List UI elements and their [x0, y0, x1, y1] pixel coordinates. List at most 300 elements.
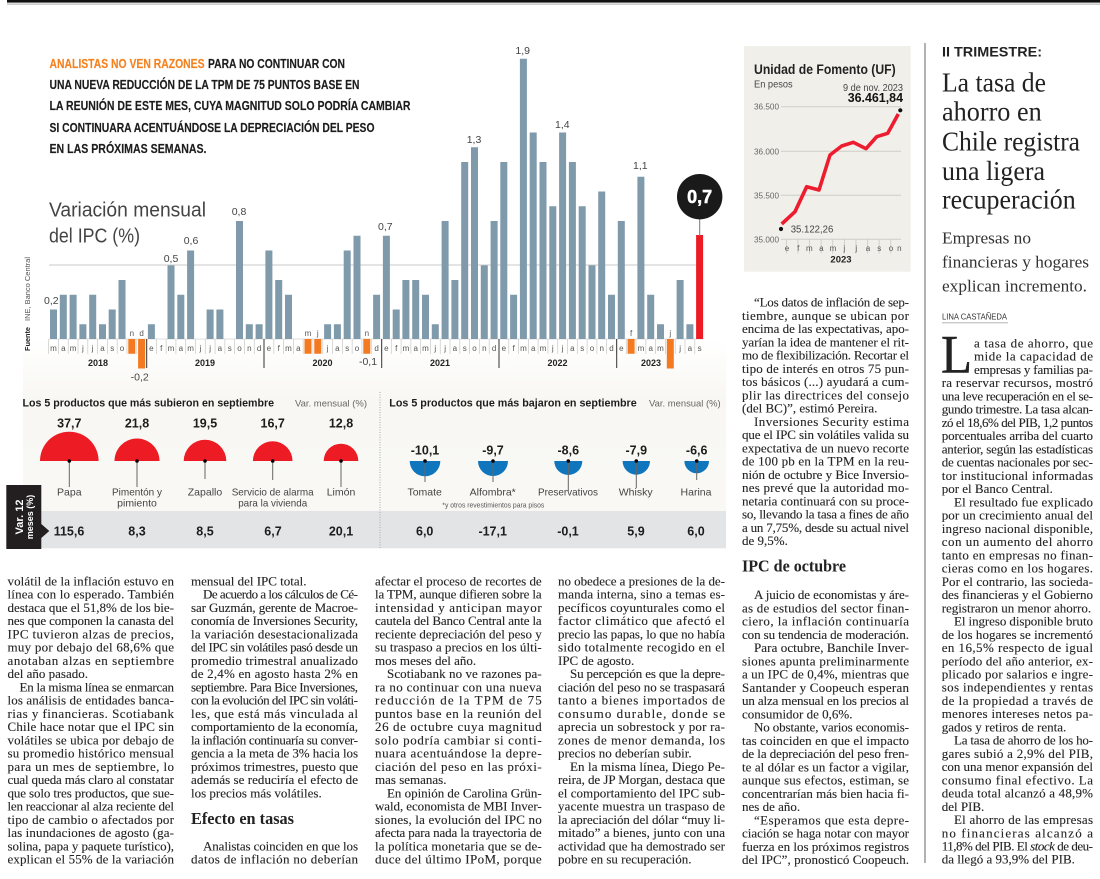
- month labels: d: [492, 344, 496, 353]
- body column 6: una leve recuperación en el se-: [942, 388, 1093, 404]
- rising 12-month values: 8,3: [128, 525, 146, 539]
- body column 3: nuara acentuándose la depre-: [375, 746, 542, 760]
- body column 3: reducción de la TPM de 75: [375, 692, 542, 708]
- month labels: j: [561, 344, 564, 353]
- body column 2: [191, 573, 358, 866]
- body column 6: zó el 18,6% del PIB, 1,2 puntos: [942, 415, 1093, 430]
- rising product labels: Servicio de alarma: [232, 487, 314, 499]
- body column 5: nes prevé que la autoridad mo-: [742, 480, 909, 495]
- rising product labels: Pimentón y: [112, 487, 163, 499]
- month labels: f: [160, 344, 163, 353]
- callout: latest value 0,7: [677, 174, 722, 236]
- body column 4: IPC de agosto.: [558, 653, 634, 668]
- blue half-circles: [410, 461, 709, 476]
- rising product labels: Papa: [57, 487, 82, 499]
- body column 3: puntos base en la reunión del: [375, 706, 542, 721]
- month labels: a: [100, 344, 105, 353]
- month labels: j: [443, 344, 446, 353]
- body column 3: la política monetaria que se de-: [375, 838, 542, 853]
- body column 1: las inundaciones de agosto (ga-: [8, 825, 174, 840]
- body column 1: cual queda más claro al constatar: [8, 772, 175, 787]
- body column 1: nes que componen la canasta del: [8, 613, 174, 628]
- body column 6: de la propiedad a través de: [942, 693, 1093, 708]
- body column 5: ciación se haga notar con mayor: [742, 826, 910, 840]
- body column 5: tipo de interés en otros 75 pun-: [742, 361, 909, 376]
- falling 12-month values: 6,0: [416, 525, 433, 539]
- heading: rising products: Los 5 productos que más subieron en septiembre: [22, 398, 274, 410]
- UF red line: [782, 114, 898, 224]
- body column 3: mos meses del año.: [375, 653, 476, 668]
- falling 12-month values: 5,9: [627, 525, 645, 539]
- body column 1: anotaban alzas en septiembre: [8, 653, 174, 668]
- kicker: II trimestre: II TRIMESTRE:: [942, 44, 1042, 60]
- body column 2: la inflación continuaría su conver-: [191, 732, 358, 747]
- rising product labels: Limón: [327, 487, 355, 499]
- body column 4: zones de menor demanda, los: [558, 732, 725, 747]
- UF month labels: o: [889, 244, 894, 253]
- body column 5: tos básicos (...) ayudará a cum-: [742, 374, 909, 389]
- body column 4: pobre en su recuperación.: [558, 852, 692, 866]
- UF month labels: m: [830, 244, 837, 253]
- body column 5: un alza mensual en los precios al: [742, 693, 909, 708]
- month labels: d: [374, 344, 379, 353]
- UF month labels: f: [797, 244, 800, 253]
- body column 5: “Los datos de inflación de sep-: [754, 294, 909, 310]
- body column 6: por el Banco Central.: [942, 481, 1053, 496]
- body column 6: gares subió a 2,9% del PIB,: [942, 746, 1093, 761]
- body column 1: tipo de cambio o afectados por: [8, 812, 175, 827]
- body column 6: cieras como en los hogares.: [942, 561, 1093, 576]
- body column 4: no obedece a presiones de la de-: [558, 573, 725, 588]
- subheading: IPC de octubre: IPC de octubre: [742, 557, 846, 576]
- body column 5: te al dólar es un factor a vigilar,: [742, 759, 909, 774]
- month labels: j: [678, 344, 681, 353]
- body column 3: su traspaso a precios en los últi-: [375, 640, 542, 654]
- month labels: a: [335, 344, 340, 353]
- month labels: m: [657, 344, 664, 353]
- body column 1: línea con lo esperado. También: [8, 586, 174, 602]
- rising 12-month values: [54, 525, 353, 539]
- UF month labels: e: [785, 244, 790, 253]
- rising 12-month values: 20,1: [329, 525, 353, 539]
- month labels: e: [149, 344, 154, 353]
- month labels: j: [668, 329, 671, 338]
- body column 5: Inversiones Security estima: [754, 414, 909, 429]
- body column 3: la TPM, aunque difieren sobre la: [375, 586, 542, 602]
- headline: analistas no ven razones: LA REUNIÓN DE ESTE MES, CUYA MAGNITUD SOLO PODRÍA CAMBIAR: [50, 98, 410, 113]
- body column 2: De acuerdo a los cálculos de Cé-: [203, 586, 358, 602]
- body column 5: Santander y Coopeuch esperan: [742, 680, 910, 695]
- body column 1: En la misma línea se enmarcan: [20, 679, 174, 694]
- body column 4: manda interna, sino a temas es-: [558, 586, 725, 602]
- body column 6: anterior, según las estadísticas: [942, 441, 1093, 456]
- month labels: o: [237, 344, 242, 353]
- month labels: m: [305, 329, 312, 338]
- body column 5: yarían la idea de mantener el rit-: [742, 334, 909, 349]
- body column 4: el comportamiento del IPC sub-: [558, 785, 725, 800]
- month labels: n: [599, 344, 604, 353]
- falling 12-month values: -17,1: [478, 525, 507, 539]
- falling values: -10,1: [411, 443, 439, 457]
- month labels: j: [91, 344, 94, 353]
- UF month labels: j: [854, 244, 857, 253]
- falling product labels: Harina: [681, 487, 712, 499]
- month labels: m: [168, 344, 175, 353]
- body column 6: [942, 336, 1093, 866]
- rising values: 21,8: [125, 417, 149, 431]
- month labels: f: [395, 344, 398, 353]
- body column 6: registraron un menor ahorro.: [942, 600, 1091, 615]
- article headline: recuperación: [942, 184, 1076, 214]
- month labels: [50, 329, 702, 353]
- year labels: 2023: [641, 358, 661, 368]
- body column 5: del IPC”, pronosticó Coopeuch.: [742, 852, 909, 867]
- rising 12-month values: 115,6: [54, 525, 84, 539]
- month labels: a: [531, 344, 536, 353]
- body column 1: destaca que el 51,8% de los bie-: [8, 600, 174, 615]
- month labels: j: [81, 344, 84, 353]
- article headline: Chile registra: [942, 127, 1080, 157]
- body column 4: yacente muestra un traspaso de: [558, 798, 725, 814]
- year labels: 2022: [547, 358, 568, 368]
- UF month labels: j: [842, 244, 845, 253]
- body column 5: Para octubre, Banchile Inver-: [754, 640, 909, 655]
- UF month labels: a: [866, 244, 871, 253]
- headline: analistas no ven razones: SI CONTINUARA ACENTUÁNDOSE LA DEPRECIACIÓN DEL PESO: [50, 120, 375, 135]
- UF latest date and value: 9 de nov. 2023: [843, 83, 903, 94]
- body column 6: mide la capacidad de: [974, 349, 1093, 364]
- month labels: s: [698, 344, 702, 353]
- falling values: [411, 443, 708, 457]
- body column 6: La tasa de ahorro de los ho-: [954, 733, 1093, 748]
- bar value labels: 1,3: [467, 134, 481, 146]
- body column 5: a un IPC de 0,4%, mientras que: [742, 666, 909, 682]
- body column 3: afecta para nada la trayectoria de: [375, 825, 542, 840]
- body column 6: con un aumento del ahorro: [942, 534, 1093, 549]
- body column 6: gundo trimestre. La tasa alcan-: [942, 402, 1093, 417]
- falling 12-month values: 6,0: [687, 525, 705, 539]
- falling product labels: Whisky: [619, 487, 653, 499]
- row tag: 12-month variation: [6, 485, 49, 549]
- falling 12-month values: -0,1: [557, 525, 579, 539]
- falling product labels: [407, 487, 712, 499]
- month labels: m: [70, 344, 77, 353]
- body column 6: consumo final efectivo. La: [942, 772, 1093, 787]
- article subhead: [942, 228, 1089, 296]
- body column 3: solo podría cambiar si conti-: [375, 732, 542, 747]
- body column 5: No obstante, varios economis-: [754, 720, 909, 734]
- month labels: o: [120, 344, 125, 353]
- body column 6: ra reservar recursos, mostró: [942, 375, 1093, 390]
- body column 5: de la depreciación del peso fren-: [742, 746, 909, 761]
- body column 5: encima de las expectativas, apo-: [742, 321, 909, 336]
- body column 6: por un crecimiento anual del: [942, 508, 1093, 523]
- month labels: d: [139, 329, 144, 338]
- body column 1: para un mes de septiembre, lo: [8, 759, 174, 774]
- UF month labels: m: [806, 244, 813, 253]
- falling 12-month values: [416, 525, 705, 539]
- body column 5: mo de flexibilización. Recortar el: [742, 348, 909, 362]
- body column 6: a tasa de ahorro, que: [974, 336, 1093, 350]
- headline: analistas no ven razones: ANALISTAS NO VEN RAZONES: [50, 57, 204, 71]
- headline: analistas no ven razones: [50, 57, 410, 156]
- body column 4: reira, de JP Morgan, destaca que: [558, 772, 725, 787]
- body column 2: los precios más volátiles.: [191, 785, 322, 800]
- month labels: m: [422, 344, 429, 353]
- body column 1: explican el 55% de la variación: [8, 852, 174, 866]
- month labels: s: [228, 344, 232, 353]
- body column 5: fuerza en los próximos registros: [742, 839, 909, 854]
- body column 6: con una menor expansión del: [942, 759, 1093, 774]
- article subhead: Empresas no: [942, 228, 1031, 247]
- bar value labels: 0,5: [164, 253, 178, 265]
- panel: Unidad de Fomento line chart: 36.500: [754, 102, 779, 112]
- legend note right: Var. mensual (%): [649, 399, 721, 410]
- bar value labels: 0,8: [232, 206, 246, 218]
- body column 2: la variación desestacionalizada: [191, 626, 358, 641]
- bar value labels: 0,2: [44, 295, 59, 307]
- red half-circles: [40, 432, 358, 461]
- rising values: 19,5: [193, 417, 217, 431]
- body column 5: siones apunta preliminarmente: [742, 653, 909, 668]
- body column 3: En opinión de Carolina Grün-: [387, 785, 542, 800]
- month labels: n: [247, 344, 252, 353]
- month labels: e: [619, 344, 624, 353]
- body column 2: datos de inflación no deberían: [191, 852, 358, 866]
- body column 5: nes de año.: [742, 799, 800, 814]
- body column 1: Chile hace notar que el IPC sin: [8, 719, 174, 734]
- row tag: 12-month variation: Var. 12: [14, 500, 26, 534]
- headline: analistas no ven razones: PARA NO CONTINUAR CON: [208, 57, 345, 71]
- body column 2: Analistas coinciden en que los: [203, 838, 358, 853]
- body column 3: siones, la evolución del IPC no: [375, 812, 542, 827]
- body column 5: (del BC)”, estimó Pereira.: [742, 400, 877, 416]
- body column 4: ciación del peso no se traspasará: [558, 679, 725, 694]
- month labels: e: [502, 344, 507, 353]
- month labels: m: [540, 344, 547, 353]
- rising 12-month values: 8,5: [196, 525, 214, 539]
- month labels: j: [433, 344, 436, 353]
- body column 6: porcentuales arriba del cuarto: [942, 428, 1093, 443]
- month labels: j: [551, 344, 554, 353]
- month labels: n: [365, 329, 369, 338]
- body column 1: solina, papa y paquete turístico),: [8, 838, 174, 853]
- body column 5: ciero, la inflación continuaría: [742, 614, 909, 628]
- month labels: a: [570, 344, 575, 353]
- article headline: [942, 68, 1080, 214]
- body column 6: de los hogares se incrementó: [942, 627, 1093, 642]
- rising values: 37,7: [57, 417, 82, 431]
- UF start value: 35.122,26: [791, 224, 834, 235]
- falling values: -8,6: [558, 443, 579, 457]
- article headline: La tasa de: [942, 68, 1046, 98]
- body column 2: mensual del IPC total.: [191, 573, 307, 588]
- bar value labels: -0,1: [359, 356, 377, 368]
- falling values: -9,7: [482, 443, 504, 457]
- body column 2: comportamiento de la economía,: [191, 719, 358, 734]
- month labels: f: [278, 344, 281, 353]
- body column 6: del PIB.: [942, 799, 984, 814]
- month labels: m: [285, 344, 292, 353]
- body column 3: ciación del peso en las próxi-: [375, 759, 542, 774]
- callout: latest value 0,7: 0,7: [687, 187, 712, 207]
- month labels: a: [218, 344, 223, 353]
- falling values: -6,6: [686, 443, 708, 457]
- month labels: m: [403, 344, 410, 353]
- month labels: s: [580, 344, 584, 353]
- body column 3: wald, economista de MBI Inver-: [375, 798, 542, 814]
- chart title: [49, 199, 206, 247]
- body column 3: afectar el proceso de recortes de: [375, 573, 542, 588]
- UF month labels: [785, 244, 902, 253]
- falling product labels: Preservativos: [538, 487, 598, 499]
- body column 1: len reaccionar al alza reciente del: [8, 798, 174, 814]
- year labels: 2019: [195, 358, 215, 368]
- body column 2: del IPC sin volátiles pasó desde un: [191, 640, 358, 654]
- body column 5: de 9,5%.: [742, 533, 788, 548]
- body column 2: septiembre. Para Bice Inversiones,: [191, 679, 358, 694]
- body column 5: de 100 pb en la TPM en la reu-: [742, 454, 909, 468]
- body column 5: que el IPC sin volátiles valida su: [742, 427, 910, 442]
- body column 2: con la evolución del IPC sin voláti-: [191, 692, 358, 708]
- article headline: una ligera: [942, 156, 1045, 186]
- bar value labels: [44, 45, 648, 384]
- rising 12-month values: 6,7: [264, 525, 282, 539]
- body column 5: con su tendencia de moderación.: [742, 627, 909, 642]
- rising values: 12,8: [329, 417, 353, 431]
- rising product labels: Zapallo: [188, 487, 222, 499]
- body column 6: El ingreso disponible bruto: [954, 614, 1093, 628]
- month labels: a: [688, 344, 693, 353]
- chart title: Variación mensual: [49, 199, 206, 222]
- body column 6: menores intereses netos pa-: [942, 706, 1093, 721]
- month labels: o: [472, 344, 477, 353]
- byline: LINA CASTAÑEDA: [942, 311, 1007, 321]
- body column 4: precios no deberían subir.: [558, 746, 692, 760]
- body column 5: concentrarían más bien hacia fi-: [742, 786, 909, 801]
- panel: products that fell most: [389, 398, 721, 539]
- panel: products that rose most: [22, 398, 367, 539]
- body column 5: a un 7,75%, desde su actual nivel: [742, 520, 909, 535]
- article subhead: financieras y hogares: [942, 252, 1089, 271]
- body column 4: pecíficos coyunturales como el: [558, 600, 725, 615]
- month labels: d: [257, 344, 261, 353]
- bar chart: monthly CPI variation: [44, 45, 704, 384]
- subheading: efecto en tasas: Efecto en tasas: [191, 809, 294, 828]
- falling values: -7,9: [626, 443, 647, 457]
- body column 4: consumo durable, donde se: [558, 706, 725, 721]
- month labels: s: [463, 344, 467, 353]
- rising values: [57, 417, 353, 431]
- month labels: e: [267, 344, 272, 353]
- source note: Fuente: [23, 327, 32, 351]
- column divider: [924, 43, 926, 863]
- body column 6: tanto en empresas no finan-: [942, 547, 1093, 562]
- month labels: e: [384, 344, 389, 353]
- body column 2: conomía de Inversiones Security,: [191, 613, 358, 628]
- legend note left: Var. mensual (%): [295, 399, 367, 410]
- month labels: d: [609, 344, 614, 353]
- panel: Unidad de Fomento line chart: 35.000: [754, 234, 779, 244]
- body column 1: su promedio histórico mensual: [8, 746, 174, 760]
- footnote: *y otros revestimientos para pisos: [442, 501, 545, 510]
- UF unit: En pesos: [754, 79, 793, 91]
- body column 3: cautela del Banco Central ante la: [375, 613, 542, 628]
- body column 2: promedio trimestral anualizado: [191, 653, 358, 668]
- month labels: o: [355, 344, 360, 353]
- month labels: s: [345, 344, 349, 353]
- body column 6: deuda total alcanzó a 48,9%: [942, 786, 1093, 801]
- bar value labels: 0,7: [378, 221, 393, 233]
- body column 6: Por el contrario, las socieda-: [942, 574, 1093, 589]
- body column 1: volátil de la inflación estuvo en: [8, 573, 174, 588]
- body column 6: El resultado fue explicado: [954, 494, 1093, 509]
- body column 1: los análisis de entidades banca-: [8, 692, 174, 708]
- body column 3: Scotiabank no ve razones pa-: [387, 666, 542, 681]
- drop cap: L: [941, 325, 972, 385]
- body column 1: rias y financieras. Scotiabank: [8, 706, 174, 721]
- bar value labels: -0,2: [131, 372, 149, 384]
- chart title: del IPC (%): [49, 224, 140, 247]
- body column 5: plir las directrices del consejo: [742, 387, 909, 402]
- month labels: a: [179, 344, 184, 353]
- body column 5: consumidor de 0,6%.: [742, 706, 852, 721]
- UF month labels: a: [819, 244, 824, 253]
- body column 6: tor institucional informadas: [942, 468, 1093, 483]
- headline: analistas no ven razones: UNA NUEVA REDUCCIÓN DE LA TPM DE 75 PUNTOS BASE EN: [50, 77, 360, 92]
- row tag: 12-month variation: meses (%): [25, 495, 35, 539]
- body column 1: volátiles se ubica por debajo de: [8, 732, 174, 747]
- body column 1: del año pasado.: [8, 666, 88, 681]
- UF grid and axis labels: [781, 107, 901, 246]
- body column 4: En la misma línea, Diego Pe-: [570, 759, 725, 774]
- bar value labels: 0,6: [184, 235, 198, 247]
- body column 4: precio las papas, lo que no había: [558, 626, 725, 641]
- article headline: ahorro en: [942, 97, 1042, 127]
- rising product labels: [57, 487, 355, 510]
- body column 4: sido totalmente recogido en el: [558, 640, 725, 654]
- month labels: j: [316, 329, 319, 338]
- rising values: 16,7: [261, 417, 285, 431]
- body column 6: ingreso nacional disponible,: [942, 521, 1093, 536]
- body column 6: gados y retiros de renta.: [942, 720, 1066, 734]
- UF month labels: n: [897, 244, 902, 253]
- body column 2: gencia a la meta de 3% hacia los: [191, 746, 358, 760]
- UF latest date and value: [843, 83, 904, 105]
- month labels: m: [50, 344, 57, 353]
- body column 3: ra no continuar con una nueva: [375, 679, 542, 694]
- body column 3: 26 de octubre cuya magnitud: [375, 719, 542, 734]
- body column 2: además se reduciría el efecto de: [191, 772, 358, 787]
- body column 1: [8, 573, 175, 866]
- month labels: m: [638, 344, 645, 353]
- body column 5: nión de octubre y Bice Inversio-: [742, 467, 909, 482]
- headline: analistas no ven razones: EN LAS PRÓXIMAS SEMANAS.: [50, 141, 206, 156]
- body column 4: aprecia un sobrestock y por ra-: [558, 719, 725, 734]
- body column 6: sos independientes y rentas: [942, 680, 1093, 695]
- body column 5: “Esperamos que esta depre-: [754, 812, 909, 827]
- body column 5: so, llevando la tasa a fines de año: [742, 506, 909, 522]
- stems and dots: [423, 459, 698, 491]
- body column 5: tas coinciden en que el impacto: [742, 733, 909, 748]
- heading: falling products: Los 5 productos que más bajaron en septiembre: [389, 398, 637, 410]
- falling product labels: Alfombra*: [470, 487, 516, 499]
- bar value labels: 1,4: [555, 119, 570, 131]
- 12-month variation band: [41, 511, 726, 548]
- month labels: n: [482, 344, 487, 353]
- body column 5: A juicio de economistas y áre-: [754, 587, 909, 602]
- year labels: 2021: [430, 358, 450, 368]
